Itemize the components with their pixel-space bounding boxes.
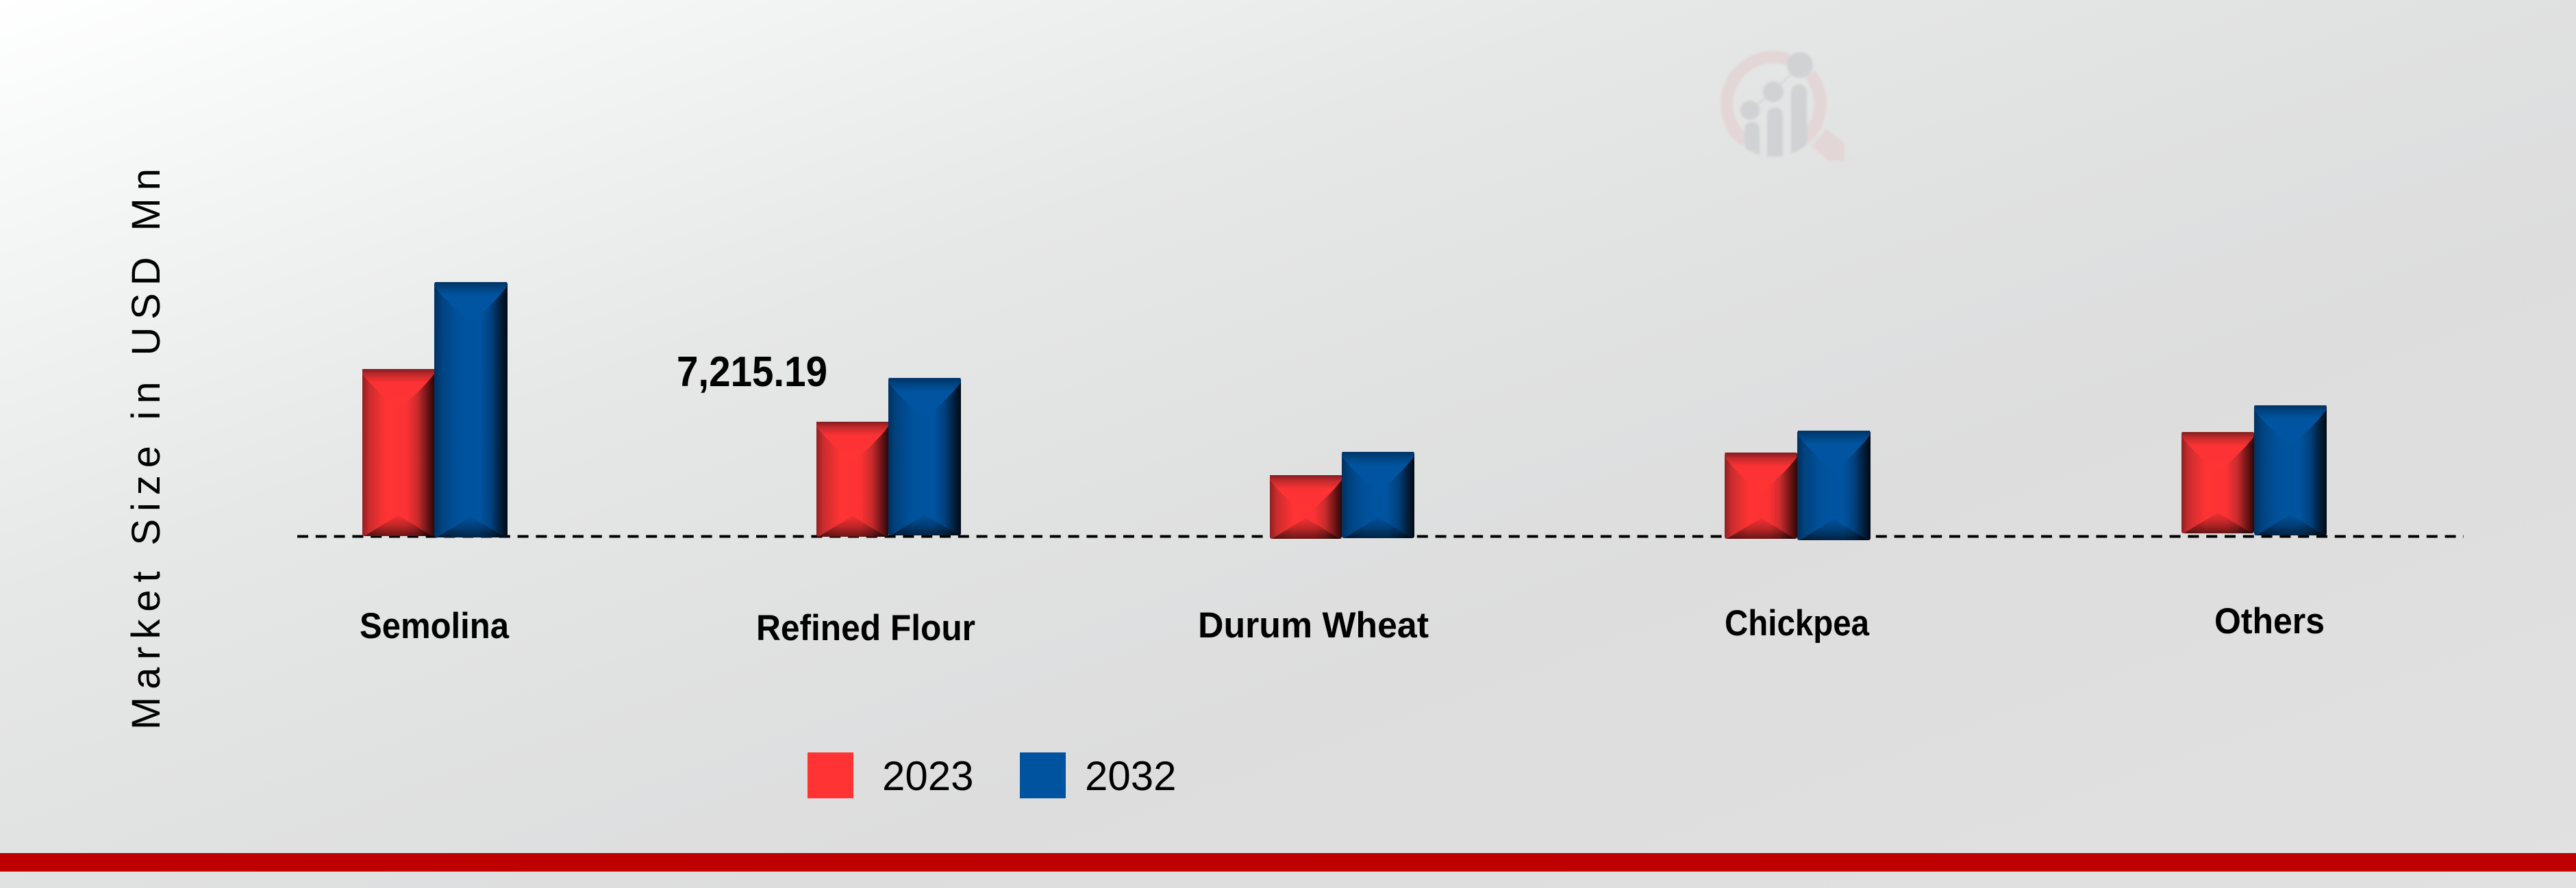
y-axis title: Market Size in USD Mn xyxy=(124,168,168,730)
logo bars xyxy=(1744,84,1807,157)
category label: Durum Wheat: Durum Wheat xyxy=(1198,605,1429,646)
legend xyxy=(808,752,1176,799)
bottom red band xyxy=(0,853,2576,872)
bar group: Others xyxy=(2181,405,2327,535)
logo trend points xyxy=(1740,52,1813,120)
bar group: Refined Flour xyxy=(816,378,961,537)
logo trend line xyxy=(1750,65,1800,110)
logo handle xyxy=(1812,129,1845,161)
watermark logo xyxy=(1727,52,1845,177)
logo ring xyxy=(1727,57,1821,141)
legend label 2032: 2032 xyxy=(1085,753,1176,799)
category label: Chickpea: Chickpea xyxy=(1725,603,1869,644)
bar: Refined Flour 2023 xyxy=(816,422,888,537)
category label: Others: Others xyxy=(2214,601,2325,642)
bar group: Durum Wheat xyxy=(1270,452,1414,539)
category label: Refined Flour: Refined Flour xyxy=(756,608,975,648)
bar: Durum Wheat 2032 xyxy=(1342,452,1414,538)
bar: Chickpea 2023 xyxy=(1725,453,1797,539)
bar group: Semolina xyxy=(362,282,508,537)
bar: Semolina 2032 xyxy=(434,282,508,537)
bar: Semolina 2023 xyxy=(362,369,434,536)
legend swatch 2032 xyxy=(1020,752,1066,798)
value label: Refined Flour 2023: 7,215.19 xyxy=(677,348,827,396)
bar: Durum Wheat 2023 xyxy=(1270,475,1342,539)
bar group: Chickpea xyxy=(1725,431,1871,540)
bar: Chickpea 2032 xyxy=(1797,431,1871,540)
bar: Refined Flour 2032 xyxy=(888,378,961,535)
baseline dashed axis xyxy=(297,535,2464,538)
category label: Semolina: Semolina xyxy=(360,606,509,646)
bar: Others 2023 xyxy=(2181,432,2254,533)
bar: Others 2032 xyxy=(2254,405,2327,535)
legend label 2023: 2023 xyxy=(882,753,973,799)
legend swatch 2023 xyxy=(808,752,853,798)
